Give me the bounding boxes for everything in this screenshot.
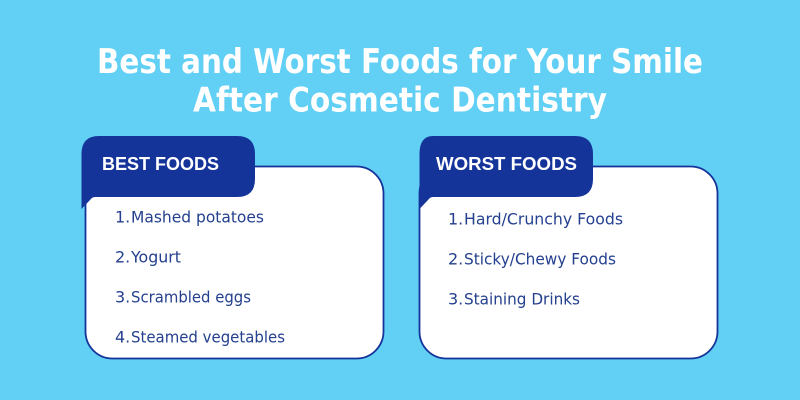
list: best foods: 1. xyxy=(115,208,130,226)
list: best foods: 2. xyxy=(115,248,130,266)
title: After Cosmetic Dentistry xyxy=(193,80,607,120)
list: worst foods: 1. xyxy=(448,210,463,228)
list: worst foods xyxy=(448,210,623,308)
list: worst foods: Hard/Crunchy Foods xyxy=(464,210,623,228)
list: worst foods: 2. xyxy=(448,250,463,268)
list: worst foods: Sticky/Chewy Foods xyxy=(464,250,616,268)
heading: worst foods: WORST FOODS xyxy=(436,153,577,174)
title xyxy=(97,42,703,120)
panel: best foods xyxy=(82,136,384,358)
list: best foods xyxy=(115,208,285,346)
heading: best foods: BEST FOODS xyxy=(102,153,219,174)
panel: worst foods xyxy=(420,136,718,358)
header tab: best foods xyxy=(82,136,255,209)
card: worst foods xyxy=(420,166,718,358)
card: best foods xyxy=(86,166,384,358)
list: best foods: 4. xyxy=(115,328,130,346)
title: Best and Worst Foods for Your Smile xyxy=(97,42,703,81)
list: best foods: Scrambled eggs xyxy=(131,288,251,306)
list: best foods: Mashed potatoes xyxy=(131,208,264,226)
list: best foods: Steamed vegetables xyxy=(131,328,285,346)
list: worst foods: Staining Drinks xyxy=(464,290,580,308)
list: best foods: Yogurt xyxy=(130,248,181,266)
header tab: worst foods xyxy=(420,136,593,209)
list: worst foods: 3. xyxy=(448,290,463,308)
list: best foods: 3. xyxy=(115,288,130,306)
